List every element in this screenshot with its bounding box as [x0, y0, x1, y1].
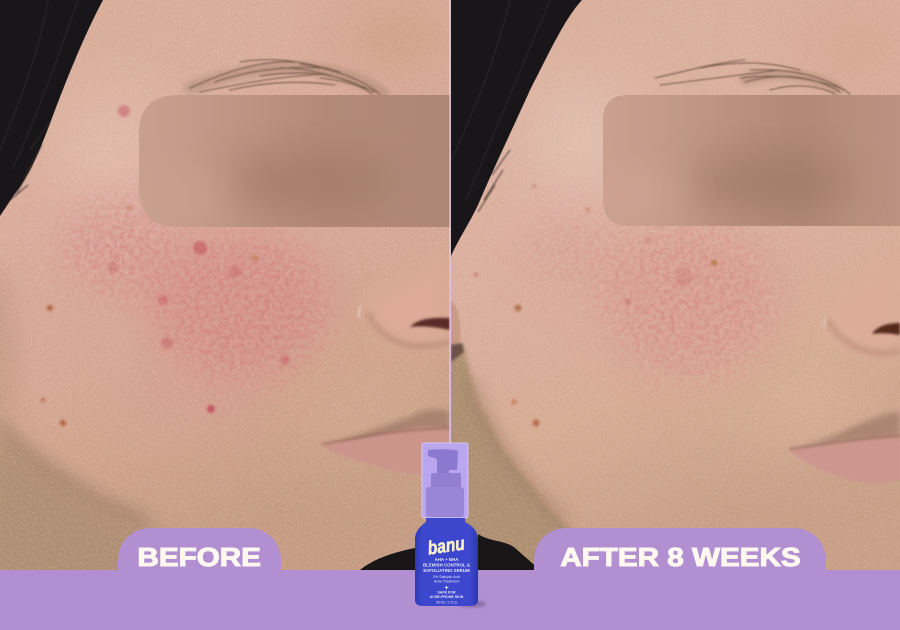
neck below jaw — [451, 342, 572, 564]
panel divider — [450, 0, 451, 570]
eyebrow — [655, 60, 850, 94]
panel: before photo — [0, 0, 480, 590]
bottle label text: 2% Salicylic Acid — [433, 575, 460, 579]
bottle label text: ACNE-PRONE SKIN — [430, 595, 464, 599]
bottle label text: 30 mL / 1 fl oz — [436, 600, 457, 604]
skin grain — [451, 0, 900, 570]
label: before — [118, 528, 281, 571]
label: before: BEFORE — [138, 542, 261, 572]
nose — [823, 286, 900, 357]
cheek left edge shading — [0, 270, 17, 416]
eyebrow — [190, 60, 383, 94]
bottle shadow — [458, 600, 486, 608]
warm tones — [534, 13, 900, 188]
bottle body — [415, 518, 478, 606]
panel: after photo — [441, 0, 900, 580]
faded redness mottling — [520, 210, 775, 380]
bottle label text: Acne Treatment — [434, 580, 459, 584]
soft flush — [520, 205, 780, 370]
jaw shadow — [470, 380, 565, 522]
label: after 8 weeks — [534, 528, 826, 571]
blemishes — [40, 105, 290, 426]
pump and collar — [426, 449, 464, 517]
lips — [320, 409, 450, 474]
brand logo: banu — [426, 534, 466, 560]
redness mottling — [60, 205, 330, 385]
faded marks — [474, 184, 717, 427]
footer band — [0, 570, 900, 630]
ear — [451, 300, 464, 362]
shadow collar — [478, 534, 540, 570]
bottle label text: BLEMISH CONTROL & — [423, 562, 471, 568]
warm forehead and mouth tones — [66, 0, 450, 188]
label: after 8 weeks: AFTER 8 WEEKS — [560, 542, 800, 572]
bottle label text: SAFE FOR — [437, 590, 456, 594]
eye privacy blur — [600, 95, 900, 226]
neck below jaw — [0, 430, 146, 570]
skin grain — [0, 0, 450, 570]
bottle label text: EXFOLIATING SERUM — [423, 568, 470, 573]
nose — [357, 275, 450, 350]
lips — [788, 413, 900, 484]
jaw shadow — [0, 425, 150, 524]
hair band — [0, 0, 103, 216]
clear cap — [422, 443, 468, 518]
eye privacy blur — [139, 95, 450, 227]
dark collar under neck — [360, 548, 415, 570]
hair band — [451, 0, 582, 256]
bottle label text: + — [444, 585, 449, 592]
soft pink flush — [145, 236, 318, 364]
bottle label text: AHA + BHA — [435, 557, 459, 562]
bottle label text — [423, 557, 471, 604]
